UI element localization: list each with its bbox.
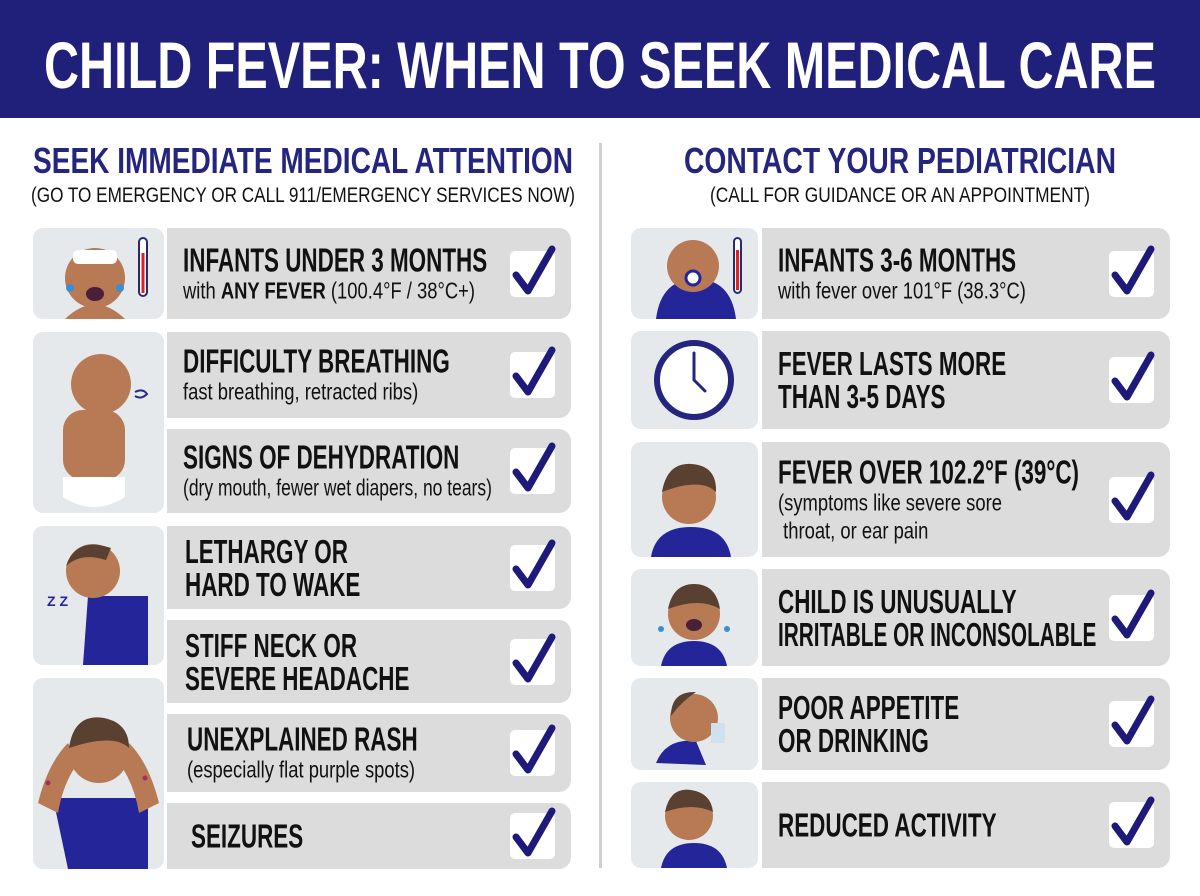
row: infants under 3 months: INFANTS UNDER 3 MONTHS <box>183 241 487 278</box>
row: reduced activity: REDUCED ACTIVITY <box>778 806 997 844</box>
row: fever over 102.2 <box>762 442 1170 557</box>
icon: sleepy child <box>33 526 164 665</box>
row: infants 3-6 months <box>762 228 1170 319</box>
icon: checkmark <box>1109 802 1154 848</box>
icon: checkmark <box>1109 476 1154 522</box>
icon: checkmark <box>1109 357 1154 403</box>
row: infants under 3 months: with ANY FEVER (100.4°F / 38°C+) <box>183 277 475 303</box>
row: dehydration: (dry mouth, fewer wet diapers, no tears) <box>183 474 492 500</box>
icon: checkmark <box>510 813 555 859</box>
row: seizures: SEIZURES <box>191 818 303 854</box>
icon: child with sore throat <box>631 442 758 557</box>
panel: immediate attention <box>33 228 571 869</box>
row: fever lasts: FEVER LASTS MORE <box>778 345 1006 382</box>
row: irritable: CHILD IS UNUSUALLY <box>778 582 1017 620</box>
icon: checkmark <box>510 352 555 398</box>
icon: clock <box>631 331 758 429</box>
row: fever over 102.2: (symptoms like severe sore <box>778 489 1002 515</box>
row: difficulty breathing <box>167 332 571 418</box>
icon: checkmark <box>510 638 555 684</box>
panel: contact pediatrician <box>631 228 1170 868</box>
icon: tired child <box>631 782 758 868</box>
row: infants under 3 months <box>167 228 571 319</box>
row: dehydration <box>167 429 571 513</box>
row: fever lasts: THAN 3-5 DAYS <box>778 378 946 415</box>
row: poor appetite: POOR APPETITE <box>778 689 959 726</box>
row: poor appetite <box>762 678 1170 770</box>
row: difficulty breathing: DIFFICULTY BREATHING <box>183 342 450 380</box>
row: dehydration: SIGNS OF DEHYDRATION <box>183 438 459 476</box>
icon: infant breathing difficulty <box>33 332 164 513</box>
row: reduced activity <box>762 782 1170 868</box>
row: infants 3-6 months: with fever over 101°F (38.3°C) <box>778 277 1026 303</box>
row: stiff neck <box>167 620 571 703</box>
icon: crying infant with thermometer <box>33 228 164 319</box>
icon: sleepy child: Z Z <box>47 593 68 609</box>
header banner <box>0 0 1200 118</box>
icon: child with headache and rash <box>33 678 164 869</box>
icon: checkmark <box>1109 701 1154 747</box>
row: seizures <box>167 803 571 869</box>
icon: checkmark <box>510 448 555 494</box>
row: rash: UNEXPLAINED RASH <box>187 720 418 758</box>
icon: checkmark <box>510 730 555 776</box>
row: irritable <box>762 569 1170 666</box>
icon: checkmark <box>1109 250 1154 296</box>
left heading <box>31 140 575 207</box>
row: rash: (especially flat purple spots) <box>187 756 415 782</box>
icon: crying girl <box>631 569 758 666</box>
icon: checkmark <box>1109 594 1154 640</box>
row: stiff neck: SEVERE HEADACHE <box>185 660 409 696</box>
row: lethargy <box>167 526 571 609</box>
right heading <box>684 140 1116 207</box>
icon: checkmark <box>510 544 555 590</box>
icon: child drinking <box>631 678 758 770</box>
row: infants 3-6 months: INFANTS 3-6 MONTHS <box>778 241 1016 278</box>
icon: checkmark <box>510 250 555 296</box>
row: lethargy: HARD TO WAKE <box>185 566 360 602</box>
row: poor appetite: OR DRINKING <box>778 722 929 759</box>
row: fever over 102.2: throat, or ear pain <box>783 517 928 543</box>
icon: infant with pacifier <box>631 228 758 319</box>
row: stiff neck: STIFF NECK OR <box>185 626 357 664</box>
row: fever lasts <box>762 331 1170 429</box>
row: irritable: IRRITABLE OR INCONSOLABLE <box>778 616 1096 652</box>
row: rash <box>167 714 571 792</box>
row: fever over 102.2: FEVER OVER 102.2°F (39°C) <box>778 453 1079 490</box>
row: lethargy: LETHARGY OR <box>185 532 348 570</box>
row: difficulty breathing: fast breathing, retracted ribs) <box>183 378 418 404</box>
